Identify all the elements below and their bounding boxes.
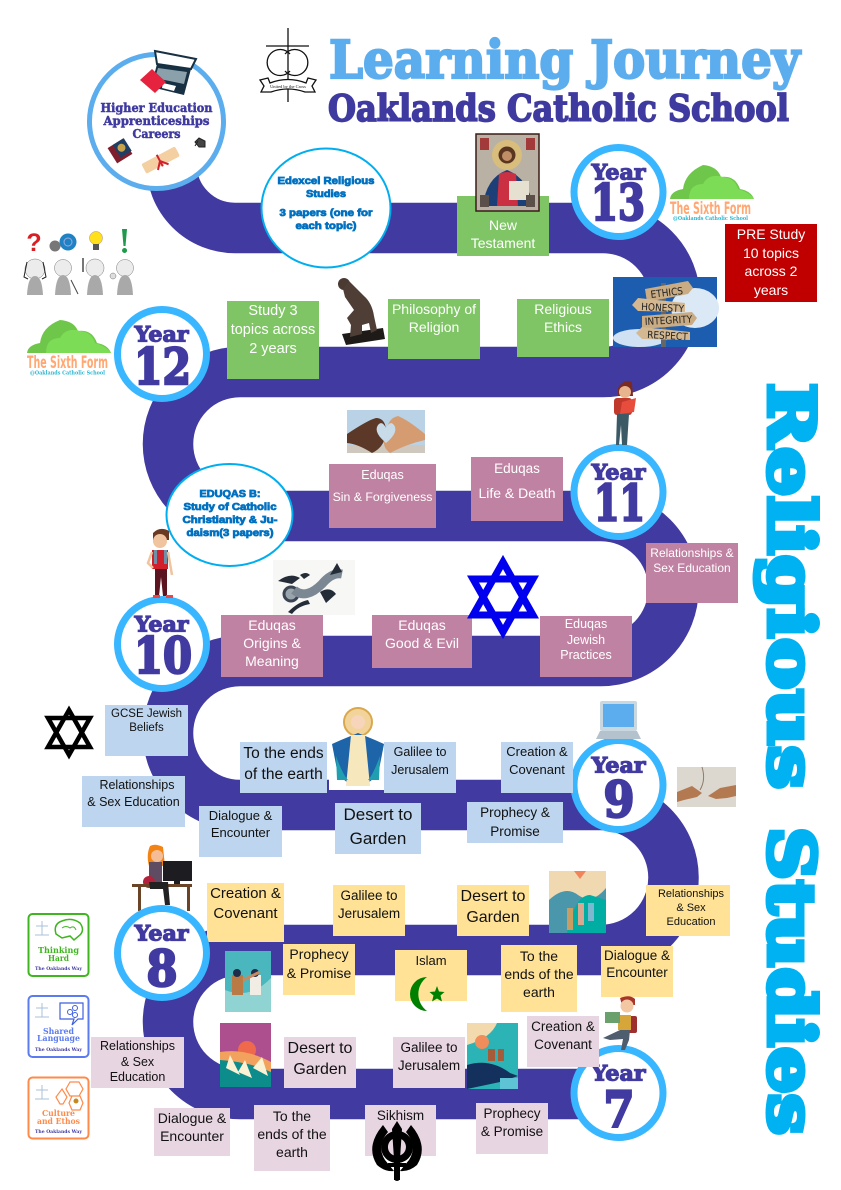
pink box: Creation and Covenant: Covenant [534, 1037, 592, 1052]
badge: Culture and Ethos: The Oaklands Way [35, 1129, 83, 1135]
pink box: To the ends of the earth: ends of the [257, 1126, 327, 1142]
green box: Study 3 topics: Study 3 [248, 303, 298, 319]
side title: Studies: Studies [753, 827, 828, 1135]
year 7 marker: Year [590, 1060, 646, 1086]
picture: ethics signpost: ETHICS [650, 286, 684, 301]
blue box: GCSE Jewish Beliefs: Beliefs [129, 722, 164, 734]
mauve box: Life and Death [471, 457, 563, 521]
yellow box: Dialogue and Encounter: Dialogue & [604, 948, 670, 963]
badge: Culture and Ethos: Culture [42, 1108, 75, 1118]
year 10 marker: Year [133, 612, 189, 636]
year 12 marker: 12 [134, 337, 191, 396]
picture: heart hands [347, 410, 425, 453]
year 13 marker: Year [590, 160, 646, 184]
badge: Shared Language [28, 996, 88, 1057]
picture: ethics signpost: RESPECT [647, 330, 688, 343]
icon: laptop [151, 51, 196, 95]
green box: Religious Ethics [517, 299, 609, 357]
mauve box: Jewish Practices: Practices [560, 648, 612, 662]
figure: boy above year 10 [148, 529, 173, 598]
year 13 marker: 13 [591, 173, 645, 232]
yellow box: Relationships and Sex Education: & Sex [676, 902, 706, 914]
year 10 marker [118, 600, 206, 688]
yellow box: Desert to Garden [457, 885, 529, 936]
badge: Culture and Ethos [28, 1078, 88, 1138]
pink box: To the ends of the earth [254, 1105, 330, 1171]
icon: khanda [372, 1121, 422, 1181]
mauve box: Relationships and Sex Education: Relationships & [650, 546, 734, 560]
oval: Edexcel [262, 148, 390, 268]
year 7 marker: 7 [604, 1080, 634, 1139]
figure: girl at desk [132, 845, 192, 911]
yellow box: To the ends of the earth [501, 945, 577, 1012]
pink box: Prophecy and Promise: Prophecy [483, 1106, 541, 1121]
yellow box: Desert to Garden: Desert to [461, 888, 525, 905]
yellow box: Prophecy and Promise: & Promise [287, 965, 351, 981]
green box: New Testament: Testament [471, 235, 535, 251]
icon: gears figure [50, 234, 78, 295]
yellow box: Creation and Covenant: Covenant [213, 905, 278, 922]
pink box: Relationships and Sex Education: Relationships [100, 1039, 175, 1053]
oval: Edexcel: Edexcel Religious [278, 175, 375, 187]
picture: hand holding figures [467, 1023, 518, 1089]
mauve box: Origins and Meaning: Meaning [245, 653, 299, 669]
oval: Edexcel: Studies [306, 188, 346, 200]
yellow box: Relationships and Sex Education: Education [667, 916, 715, 928]
badge: Shared Language: Shared [43, 1026, 74, 1036]
yellow box: To the ends of the earth: earth [523, 984, 555, 1000]
year 9 marker: Year [590, 752, 646, 778]
pink box: Dialogue and Encounter: Dialogue & [158, 1110, 226, 1126]
pink box: Dialogue and Encounter: Encounter [160, 1128, 224, 1144]
pink box: Galilee to Jerusalem: Jerusalem [398, 1058, 460, 1073]
year 9 marker [574, 740, 663, 830]
blue box: To the ends of the earth: of the earth [244, 766, 323, 783]
icon: lightbulb figure [83, 232, 104, 295]
icon group: thinking figures [24, 229, 134, 295]
year 8 marker [118, 908, 206, 998]
mauve box: Life and Death: Eduqas [494, 461, 540, 476]
icon: question mark figure: ? [26, 229, 42, 257]
oval: Eduqas B: EDUQAS B: [200, 488, 260, 500]
blue box: Relationships and Sex Education [82, 776, 185, 827]
mauve box: Sin and Forgiveness [329, 464, 436, 528]
picture: desert to garden, yellow row [549, 871, 606, 933]
logo: The Sixth Form, right: @Oaklands Catholic School [673, 215, 748, 222]
yellow box: To the ends of the earth: To the [520, 948, 558, 964]
mauve box: Origins and Meaning: Eduqas [248, 617, 296, 633]
icon: blue star of David [473, 562, 533, 632]
oval: Edexcel: 3 papers (one for [280, 207, 372, 219]
blue box: GCSE Jewish Beliefs [105, 705, 188, 756]
pink box: Sikhism: Sikhism [377, 1108, 424, 1123]
oval: Eduqas B [166, 464, 292, 566]
blue box: Creation and Covenant: Creation & [506, 744, 568, 759]
mauve box: Good and Evil: Eduqas [398, 617, 446, 633]
blue box: Prophecy and Promise: Promise [490, 824, 540, 839]
pink box: Dialogue and Encounter [154, 1108, 230, 1156]
icon: red book [140, 69, 166, 93]
oval: Eduqas B: daism(3 papers) [186, 527, 274, 539]
logo: The Sixth Form, right [670, 165, 754, 222]
side title: Religious: Religious [753, 383, 828, 789]
badge: Culture and Ethos: and Ethos [37, 1116, 80, 1126]
blue box: To the ends of the earth [240, 742, 327, 793]
yellow box: Creation and Covenant: Creation & [210, 885, 281, 902]
year 11 marker [574, 448, 663, 536]
pink box: Creation and Covenant [527, 1016, 599, 1067]
green box: Study 3 topics: topics across [231, 322, 315, 338]
yellow box: Galilee to Jerusalem [333, 885, 405, 936]
yellow box: Dialogue and Encounter: Encounter [606, 965, 668, 980]
icon: laptop above year 9 [596, 701, 641, 739]
pink box: Desert to Garden [284, 1037, 356, 1088]
mauve box: Origins and Meaning: Origins & [243, 635, 301, 651]
picture: thinker statue [338, 278, 385, 345]
year 12 marker: Year [133, 322, 189, 346]
year 12 marker [118, 310, 206, 398]
pink box: Prophecy and Promise [476, 1103, 548, 1154]
mauve box: Jewish Practices [540, 616, 632, 677]
heading: progression routes [100, 101, 213, 141]
badge: Shared Language: The Oaklands Way [35, 1047, 83, 1053]
mauve box: Sin and Forgiveness: Sin & Forgiveness [333, 490, 432, 504]
blue box: Prophecy and Promise: Prophecy & [480, 805, 550, 820]
green box: Study 3 topics: 2 years [249, 341, 297, 357]
year 9 marker: 9 [604, 770, 634, 829]
red box: PRE Study: PRE Study [737, 226, 805, 242]
heading: progression routes: Higher Education [100, 101, 213, 115]
green box: Religious Ethics: Ethics [544, 319, 582, 335]
school crest logo [260, 28, 316, 102]
pink box: Sikhism [365, 1105, 436, 1156]
year 7 marker [574, 1048, 663, 1139]
blue box: Dialogue and Encounter [199, 806, 282, 857]
yellow box: Relationships and Sex Education: Relationships [658, 888, 724, 900]
icon: black star of David [48, 710, 90, 755]
year 13 marker [574, 148, 663, 236]
icon: passport [108, 138, 133, 163]
red box: PRE Study: across 2 [745, 263, 797, 279]
yellow box: Galilee to Jerusalem: Jerusalem [338, 906, 400, 921]
icon: scroll [141, 145, 181, 176]
icon: keys [195, 138, 205, 147]
green box: Philosophy of Religion [388, 299, 480, 359]
figure: boy with books above year 7 [603, 996, 637, 1050]
blue box: Creation and Covenant [501, 742, 573, 793]
blue box: GCSE Jewish Beliefs: GCSE Jewish [111, 708, 182, 720]
green box: Study 3 topics [227, 301, 319, 379]
year 8 marker: 8 [146, 939, 178, 998]
pink box: Relationships and Sex Education: & Sex [121, 1054, 154, 1068]
yellow box: Relationships and Sex Education [646, 885, 730, 936]
yellow box: Dialogue and Encounter [601, 946, 673, 997]
blue box: Desert to Garden: Garden [350, 829, 406, 848]
picture: evolution illustration [273, 560, 355, 615]
oval: Eduqas B: Christianity & Ju- [182, 514, 278, 526]
yellow box: Islam [395, 950, 467, 1001]
yellow box: Galilee to Jerusalem: Galilee to [340, 888, 398, 903]
pink box: Creation and Covenant: Creation & [531, 1019, 595, 1034]
blue box: Relationships and Sex Education: & Sex Education [87, 795, 180, 809]
picture: icon of Christ [476, 134, 539, 211]
badge: Thinking Hard: The Oaklands Way [35, 966, 83, 972]
pink box: To the ends of the earth: To the [273, 1108, 311, 1124]
blue box: Desert to Garden: Desert to [344, 805, 412, 824]
yellow box: To the ends of the earth: ends of the [504, 966, 574, 982]
logo: The Sixth Form, right: The Sixth Form [670, 199, 751, 219]
heading: progression routes: Apprenticeships [103, 114, 210, 128]
subtitle: Oaklands Catholic School: Oaklands Catholic School [328, 88, 789, 130]
picture: lilies at sunset [220, 1023, 271, 1087]
pink box: Relationships and Sex Education [91, 1037, 184, 1088]
green box: Philosophy of Religion: Philosophy of [392, 301, 476, 317]
pink box: Galilee to Jerusalem [393, 1037, 465, 1088]
blue box: Galilee to Jerusalem: Jerusalem [391, 763, 449, 777]
picture: ethics signpost [613, 277, 719, 347]
mauve box: Life and Death: Life & Death [478, 485, 556, 501]
green box: New Testament [457, 196, 549, 256]
pink box: Desert to Garden: Desert to [288, 1040, 352, 1057]
logo: The Sixth Form, left: The Sixth Form [27, 353, 108, 373]
red box: PRE Study [725, 224, 817, 302]
yellow box: Creation and Covenant [207, 883, 284, 942]
blue box: Dialogue and Encounter: Encounter [211, 825, 270, 840]
year 11 marker: Year [590, 460, 646, 484]
green box: Religious Ethics: Religious [534, 301, 592, 317]
green box: New Testament: New [489, 217, 517, 233]
mauve box: Relationships and Sex Education: Sex Education [653, 561, 731, 575]
yellow box: Prophecy and Promise [283, 944, 355, 995]
pink box: Prophecy and Promise: & Promise [481, 1124, 543, 1139]
red box: PRE Study: years [754, 282, 788, 298]
logo: The Sixth Form, left [27, 320, 111, 376]
higher education circle [90, 51, 224, 188]
road path [168, 150, 675, 1094]
blue box: Galilee to Jerusalem: Galilee to [394, 745, 446, 759]
figure: student with book above year 11 [614, 381, 636, 445]
pink box: Desert to Garden: Garden [293, 1061, 347, 1078]
logo: The Sixth Form, left: @Oaklands Catholic School [30, 370, 105, 376]
heading: progression routes: Careers [132, 127, 181, 141]
blue box: Prophecy and Promise [467, 802, 563, 843]
blue box: Creation and Covenant: Covenant [509, 762, 565, 777]
yellow box: Desert to Garden: Garden [466, 909, 520, 926]
badge: Shared Language: Language [37, 1033, 80, 1043]
year 11 marker: 11 [594, 474, 645, 532]
yellow box: Islam: Islam [415, 953, 447, 968]
mauve box: Origins and Meaning [221, 615, 323, 677]
pink box: To the ends of the earth: earth [276, 1144, 308, 1160]
badge: Thinking Hard: Hard [48, 953, 69, 963]
mauve box: Good and Evil [372, 615, 472, 668]
school crest logo: United by the Cross [270, 84, 306, 89]
badge: Thinking Hard: Thinking [38, 945, 79, 955]
picture: ethics signpost: HONESTY [641, 302, 685, 315]
yellow box: Prophecy and Promise: Prophecy [289, 946, 349, 962]
mauve box: Relationships and Sex Education [646, 543, 738, 603]
blue box: Dialogue and Encounter: Dialogue & [209, 808, 272, 823]
icon: crescent and star [410, 977, 444, 1011]
mauve box: Jewish Practices: Eduqas [565, 617, 607, 631]
oval: Eduqas B: Study of Catholic [184, 501, 277, 513]
picture: creation of Adam hands [677, 767, 736, 807]
picture: ethics signpost: INTEGRITY [645, 315, 693, 328]
badge: Thinking Hard [28, 914, 88, 976]
pink box: Relationships and Sex Education: Education [110, 1070, 165, 1084]
title: Learning Journey: Learning Journey [329, 30, 802, 91]
mauve box: Jewish Practices: Jewish [567, 632, 605, 646]
green box: Philosophy of Religion: Religion [409, 319, 459, 335]
blue box: To the ends of the earth: To the ends [243, 745, 324, 762]
blue box: Galilee to Jerusalem [384, 742, 456, 793]
mauve box: Good and Evil: Good & Evil [385, 635, 459, 651]
year 10 marker: 10 [134, 626, 192, 685]
picture: figures by water [225, 951, 271, 1012]
icon: exclamation figure [110, 229, 134, 295]
oval: Edexcel: each topic) [296, 220, 356, 232]
blue box: Desert to Garden [335, 803, 421, 854]
red box: PRE Study: 10 topics [743, 244, 799, 260]
blue box: Relationships and Sex Education: Relationships [99, 778, 174, 792]
year 8 marker: Year [133, 920, 189, 946]
pink box: Galilee to Jerusalem: Galilee to [400, 1040, 458, 1055]
picture: Mary [329, 705, 384, 790]
mauve box: Sin and Forgiveness: Eduqas [361, 468, 404, 482]
